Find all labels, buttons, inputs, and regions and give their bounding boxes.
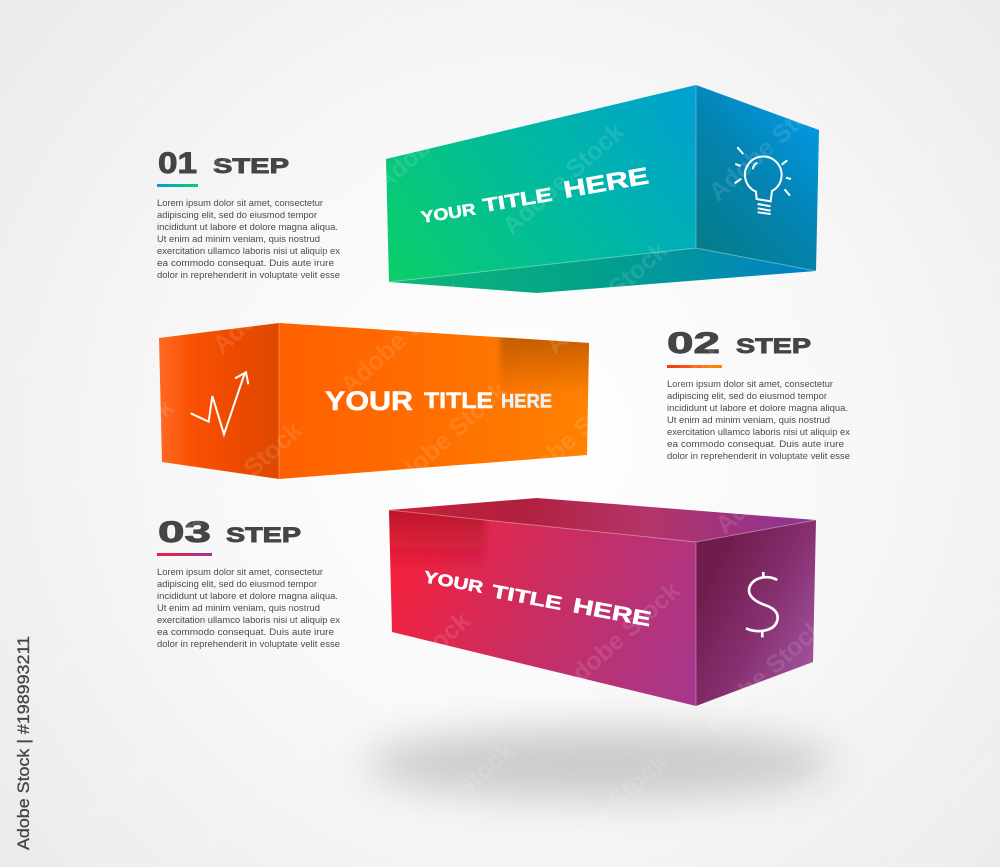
- box right face: [696, 85, 819, 271]
- watermarks: Adobe Stock: [697, 613, 830, 736]
- watermarks: Adobe Stock: [175, 416, 308, 539]
- body text: ea commodo consequat. Duis aute irure: [157, 258, 334, 269]
- watermarks: Adobe Stock: [55, 726, 188, 849]
- watermarks: Adobe Stock: [343, 606, 476, 729]
- body text: Ut enim ad minim veniam, quis nostrud: [157, 234, 320, 245]
- watermarks: Adobe Stock: [505, 376, 638, 499]
- icon: dollar sign: [746, 572, 778, 637]
- body text: Lorem ipsum dolor sit amet, consectetur: [157, 198, 324, 209]
- box title: TITLE: [481, 185, 554, 217]
- box title: [420, 162, 651, 227]
- box front face: [279, 323, 589, 479]
- heading: 02 STEP: 02: [667, 327, 720, 360]
- watermarks: Adobe Stock: [185, 743, 318, 866]
- box front face: [389, 510, 696, 706]
- reflection shading: [497, 337, 589, 387]
- body text: dolor in reprehenderit in voluptate velit esse: [157, 270, 340, 281]
- box title: HERE: [501, 390, 552, 412]
- panel: green-blue box: [386, 85, 819, 293]
- watermarks: Adobe Stock: [840, 453, 973, 576]
- floor shadow: [365, 728, 835, 800]
- box title: HERE: [561, 162, 651, 203]
- heading: 03 STEP: 03: [158, 516, 211, 549]
- heading: 02 STEP: STEP: [736, 335, 811, 358]
- box title: YOUR: [422, 568, 485, 597]
- body text: Ut enim ad minim veniam, quis nostrud: [667, 415, 830, 426]
- box title: [422, 568, 653, 631]
- heading: 02 STEP: [667, 327, 811, 360]
- icon: rising arrow chart: [191, 372, 248, 434]
- underline: [157, 184, 198, 187]
- panel: step 02 text: [667, 327, 850, 462]
- heading: 01 STEP: STEP: [213, 155, 289, 178]
- heading: 01 STEP: [158, 147, 289, 180]
- box title: TITLE: [490, 580, 564, 614]
- body text: Lorem ipsum dolor sit amet, consectetur: [157, 567, 324, 578]
- panel: step 01 text: [157, 147, 340, 281]
- icon: light bulb: [735, 147, 791, 214]
- body text: adipiscing elit, sed do eiusmod tempor: [157, 210, 318, 221]
- body text: [157, 198, 340, 281]
- box underside: [389, 248, 816, 293]
- underline: [667, 365, 722, 368]
- watermarks: Adobe Stock: [47, 393, 180, 516]
- body text: incididunt ut labore et dolore magna aliqua.: [157, 222, 338, 233]
- stock id label: Adobe Stock | #198993211: [14, 636, 33, 850]
- reflection shading: [389, 510, 487, 563]
- body text: ea commodo consequat. Duis aute irure: [157, 627, 334, 638]
- body text: dolor in reprehenderit in voluptate velit esse: [667, 451, 850, 462]
- heading: 03 STEP: STEP: [226, 524, 301, 547]
- watermarks: Adobe Stock: [497, 117, 630, 240]
- body text: Lorem ipsum dolor sit amet, consectetur: [667, 379, 834, 390]
- box title: YOUR: [420, 201, 477, 227]
- body text: ea commodo consequat. Duis aute irure: [667, 439, 844, 450]
- box edge highlights: [279, 85, 816, 706]
- watermarks: Adobe Stock: [553, 576, 686, 699]
- watermarks: Adobe Stock: [387, 736, 520, 859]
- body text: incididunt ut labore et dolore magna aliqua.: [667, 403, 848, 414]
- watermarks: Adobe Stock: [710, 416, 843, 539]
- watermarks: Adobe Stock: [3, 263, 136, 386]
- body text: [157, 567, 340, 650]
- box title: HERE: [571, 594, 653, 631]
- watermarks: Adobe Stock: [207, 236, 340, 359]
- panel: orange box: [159, 323, 600, 479]
- body text: incididunt ut labore et dolore magna aliqua.: [157, 591, 338, 602]
- box title: [325, 386, 552, 416]
- box front face: [386, 85, 696, 282]
- panel: step 03 text: [157, 516, 340, 650]
- watermarks: Adobe Stock: [370, 73, 503, 196]
- watermarks: Adobe Stock: [703, 83, 836, 206]
- watermarks: Adobe Stock: [380, 376, 513, 499]
- box side face: [159, 323, 279, 479]
- body text: adipiscing elit, sed do eiusmod tempor: [157, 579, 318, 590]
- body text: exercitation ullamco laboris nisi ut aliquip ex: [157, 615, 340, 626]
- heading: 01 STEP: 01: [158, 147, 197, 180]
- watermarks: Adobe Stock: [35, 63, 168, 186]
- watermarks: Adobe Stock: [190, 61, 323, 184]
- box right face: [696, 520, 816, 706]
- body text: dolor in reprehenderit in voluptate velit esse: [157, 639, 340, 650]
- body text: Ut enim ad minim veniam, quis nostrud: [157, 603, 320, 614]
- box title: YOUR: [325, 386, 413, 416]
- body text: exercitation ullamco laboris nisi ut aliquip ex: [667, 427, 850, 438]
- heading: 03 STEP: [158, 516, 301, 549]
- watermarks: Adobe Stock: [13, 583, 146, 706]
- watermarks: Adobe Stock: [665, 276, 798, 399]
- box title: TITLE: [424, 388, 493, 413]
- body text: exercitation ullamco laboris nisi ut aliquip ex: [157, 246, 340, 257]
- watermarks: Adobe Stock: [335, 276, 468, 399]
- body text: adipiscing elit, sed do eiusmod tempor: [667, 391, 828, 402]
- watermarks: Adobe Stock: [827, 125, 960, 248]
- box top face: [389, 498, 816, 542]
- watermarks: Adobe Stock: [720, 743, 853, 866]
- underline: [157, 553, 212, 556]
- panel: red-purple box: [380, 498, 816, 706]
- watermarks: Adobe Stock: [540, 236, 673, 359]
- watermarks: Adobe Stock: [217, 563, 350, 686]
- body text: [667, 379, 850, 462]
